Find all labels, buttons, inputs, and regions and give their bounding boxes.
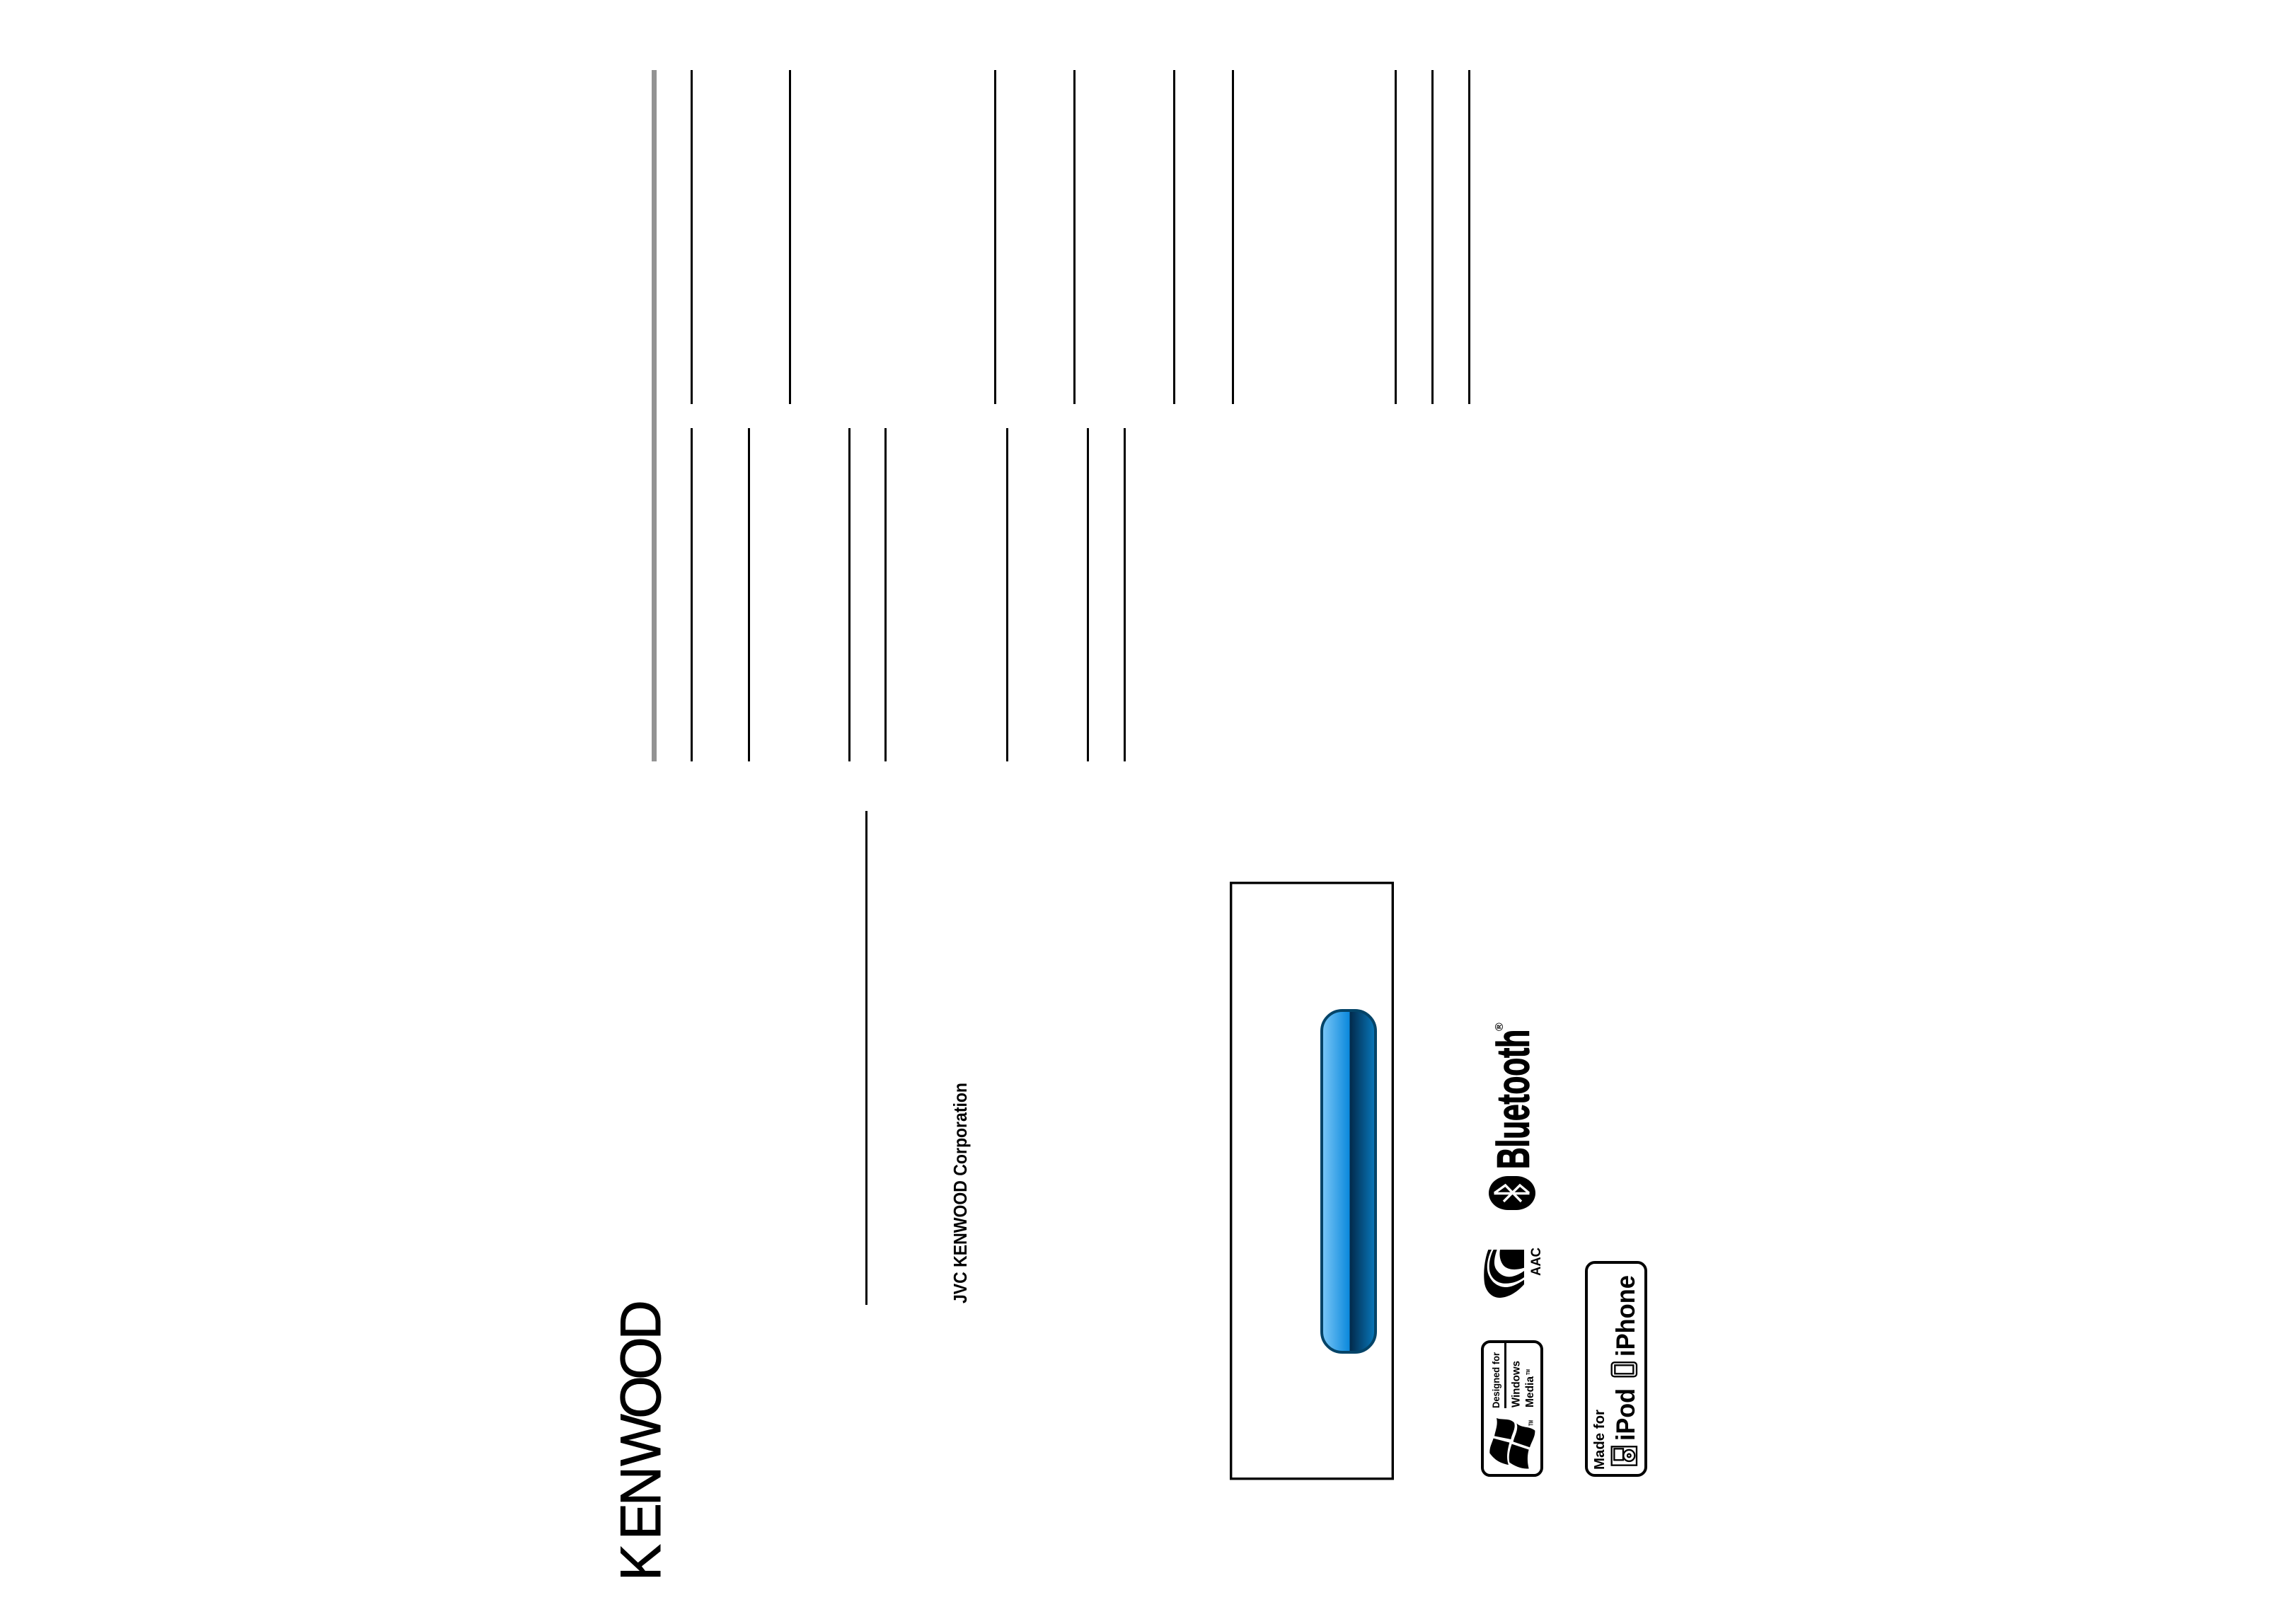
product box xyxy=(1231,883,1393,1479)
iPod label: iPod xyxy=(1611,1388,1640,1441)
Media trademark: TM xyxy=(1526,1369,1531,1375)
Bluetooth logo xyxy=(1487,1023,1538,1210)
iPhone icon xyxy=(1612,1362,1637,1376)
Made for label: Made for xyxy=(1592,1410,1608,1470)
badge outline xyxy=(1586,1262,1646,1475)
AAC label: AAC xyxy=(1529,1248,1544,1276)
Made for iPod iPhone badge xyxy=(1586,1262,1646,1475)
badge outline xyxy=(1482,1342,1542,1475)
flag trademark: TM xyxy=(1528,1420,1534,1426)
lower column of rules xyxy=(691,428,1126,761)
Designed for label: Designed for xyxy=(1490,1352,1501,1408)
Media label: Media xyxy=(1524,1376,1536,1407)
Designed for Windows Media badge xyxy=(1482,1342,1542,1475)
rule beside logo xyxy=(865,811,867,1305)
iPod icon xyxy=(1612,1446,1637,1465)
grey vertical rule xyxy=(652,70,657,761)
iPhone label: iPhone xyxy=(1611,1275,1640,1357)
company name: JVC KENWOOD Corporation xyxy=(950,1083,971,1303)
AAC swoosh mark xyxy=(1484,1250,1524,1298)
KENWOOD logo: KENWOOD xyxy=(609,1300,672,1581)
Windows flag icon xyxy=(1489,1418,1535,1469)
Bluetooth wordmark: Bluetooth xyxy=(1487,1030,1538,1169)
badge divider xyxy=(1504,1342,1506,1408)
Windows label: Windows xyxy=(1510,1361,1523,1407)
blue pill graphic xyxy=(1322,1010,1376,1352)
upper column of rules xyxy=(691,70,1470,404)
Bluetooth badge xyxy=(1489,1176,1535,1210)
AAC logo xyxy=(1484,1248,1544,1298)
registered mark: ® xyxy=(1494,1023,1506,1031)
